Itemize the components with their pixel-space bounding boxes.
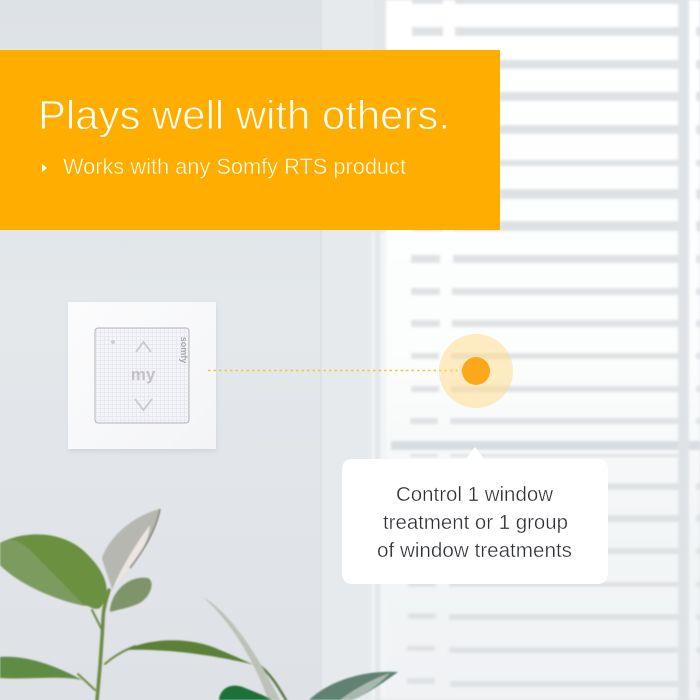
leaf: pale curved xyxy=(203,597,280,700)
title: Plays well with others. xyxy=(38,92,450,138)
callout: treatment or 1 group xyxy=(383,512,568,534)
callout: of window treatments xyxy=(377,540,572,562)
marker: hotspot xyxy=(439,334,513,408)
icon: up chevron xyxy=(136,342,151,352)
icon: down chevron xyxy=(135,399,152,410)
wall switch xyxy=(68,302,217,452)
switch plate xyxy=(68,302,216,449)
switch keypad xyxy=(95,328,189,423)
callout xyxy=(342,447,608,584)
leaf: dark bottom xyxy=(219,686,272,700)
callout: Control 1 window xyxy=(396,484,554,506)
panel: orange headline banner xyxy=(0,50,500,230)
icon: bullet arrow xyxy=(42,164,47,172)
plant stems xyxy=(78,590,286,700)
my label: my xyxy=(131,365,156,384)
leaf: narrow middle xyxy=(125,640,259,666)
leaf: pale upright xyxy=(102,509,160,590)
brand label: somfy xyxy=(179,337,189,363)
leaf: large green xyxy=(0,534,107,609)
bullet text: Works with any Somfy RTS product xyxy=(63,154,407,179)
background: window with blinds xyxy=(372,0,700,700)
plant xyxy=(0,509,398,700)
connector dotted line xyxy=(208,370,464,372)
icon: indicator light xyxy=(111,340,115,344)
leaf: lower right xyxy=(309,672,398,700)
leaf: lower left xyxy=(0,657,82,680)
leaf: small xyxy=(110,578,152,612)
